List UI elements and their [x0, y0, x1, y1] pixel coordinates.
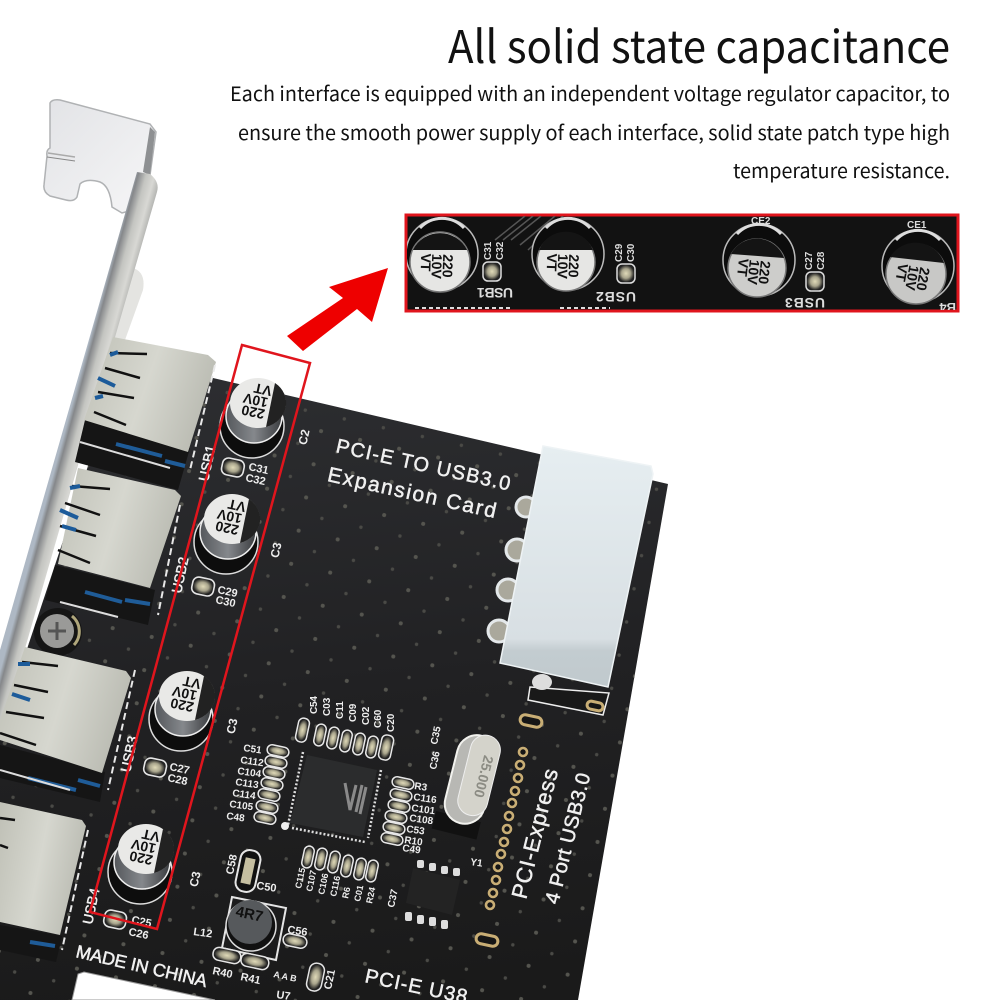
board label: made in China: MADE IN CHINA [74, 941, 209, 991]
component labels above chip: C20 [386, 713, 397, 732]
component labels right of chip: C101 [411, 803, 436, 817]
small capacitor pads and labels near large capacitors: C27 [168, 761, 191, 777]
capacitor array left of chip [253, 744, 290, 825]
inset capacitor 1: 220 [439, 254, 456, 278]
component labels above chip: C60 [373, 709, 384, 728]
inset capacitor 3 [723, 224, 795, 297]
component labels left of chip: C48 [226, 811, 246, 825]
inset silkscreen labels: USB1 [477, 285, 513, 301]
component labels above chip: C11 [335, 701, 346, 719]
board label: PCI-Express 4 Port USB3.0: 4 Port USB3.0 [542, 771, 595, 906]
component labels below chip: C116 [328, 875, 342, 897]
board label: PCI-E to USB3.0: PCI-E TO USB3.0 [334, 435, 512, 495]
gold oblong mounting holes [475, 700, 604, 947]
inductor 4R7 [222, 897, 286, 960]
inset silkscreen labels: C32 [495, 241, 506, 260]
component labels right of chip: C53 [406, 824, 426, 838]
component labels above chip: C54 [309, 696, 320, 714]
lower-left component labels: C21 [322, 968, 338, 991]
capacitor 4 [108, 824, 174, 904]
eight-pin IC [405, 860, 460, 929]
component labels right of chip: C116 [413, 792, 438, 806]
inset silkscreen labels: C27 [804, 251, 815, 270]
capacitor 3 [149, 671, 215, 751]
component labels right of chip: R10 [404, 835, 424, 849]
inset capacitor 3: 220 [755, 260, 774, 285]
inset silkscreen labels: USB3 [785, 295, 825, 311]
small capacitor pads and labels near large capacitors: C29 [216, 584, 239, 600]
capacitor 2: 220 [214, 518, 240, 538]
description text: temperature resistance. [733, 155, 950, 184]
small capacitor pads and labels near large capacitors: C2 [296, 428, 313, 446]
inset small pads [483, 262, 824, 291]
metal PCI bracket [0, 100, 158, 735]
port labels [79, 443, 219, 926]
inset capacitor 3: VT [734, 258, 752, 278]
silkscreen port outlines [62, 365, 215, 950]
capacitor 3: VT [181, 673, 202, 692]
small capacitor pads and labels near large capacitors: C26 [127, 926, 150, 942]
component labels below chip: R24 [364, 886, 377, 904]
lower-left component labels: L12 [193, 926, 213, 941]
small capacitor pads and labels near large capacitors: C28 [166, 772, 189, 788]
small capacitor pads and labels near large capacitors: C3 [268, 541, 285, 559]
capacitor 2: 10V [215, 506, 243, 527]
component labels right of chip [386, 725, 484, 909]
capacitor 1 [220, 378, 286, 458]
black circuit board [0, 378, 668, 1000]
inset silkscreen labels: C28 [816, 251, 827, 270]
capacitor array right of chip [380, 776, 415, 846]
USB port 4 [0, 802, 86, 962]
red arrow [287, 268, 388, 351]
crystal oscillator: 25.000 [471, 754, 497, 799]
capacitor 1: 220 [240, 402, 266, 422]
inset capacitor 4: VT [893, 262, 911, 283]
small capacitor pads and labels near large capacitors: C31 [247, 461, 270, 477]
inset photo of capacitors [406, 215, 958, 315]
inset capacitor 2 [532, 218, 604, 291]
board label: PCI-E to USB3.0: Expansion Card [325, 463, 498, 523]
board label: PCI-E to USB3.0 [325, 435, 512, 525]
component labels right of chip: C49 [402, 843, 422, 857]
component labels left of chip: C113 [235, 777, 260, 791]
small capacitor pads and labels near large capacitors [103, 428, 313, 942]
capacitor 3: 220 [169, 695, 195, 715]
mounting screw [34, 608, 82, 656]
port labels: USB2 [168, 555, 192, 595]
capacitor 2 [194, 494, 260, 574]
capacitor C58 [234, 848, 262, 894]
capacitor 3: 10V [170, 683, 198, 704]
lower-left component labels: A A B [273, 969, 298, 984]
inset capacitor 2: 10V [554, 254, 571, 280]
inset silkscreen labels: CE1 [907, 220, 927, 231]
component labels right of chip: R3 [414, 781, 428, 794]
inset capacitor 4 [882, 230, 954, 304]
component labels below chip: C107 [304, 869, 318, 892]
small pads bottom row [212, 933, 326, 992]
description text: ensure the smooth power supply of each interface, solid state patch type high [238, 117, 950, 146]
inset silkscreen labels: C29 [614, 243, 625, 262]
main controller chip [281, 752, 381, 842]
component labels left of chip: C51 [243, 743, 263, 757]
capacitor 4: 220 [128, 848, 154, 868]
lower-left component labels: C50 [256, 880, 277, 895]
small capacitor pads and labels near large capacitors: C32 [244, 472, 267, 488]
capacitor array above chip [295, 717, 395, 761]
lower-left component labels: C56 [287, 924, 308, 939]
capacitor 1: 10V [241, 390, 269, 411]
component labels right of chip: C36 [428, 750, 443, 771]
inset capacitor 1: VT [418, 253, 434, 272]
component labels right of chip: Y1 [470, 857, 484, 870]
port labels: USB3 [117, 734, 141, 774]
component labels right of chip: C35 [429, 725, 444, 746]
lower-left component labels: R41 [239, 971, 262, 987]
component labels below chip: C01 [352, 884, 365, 902]
component labels left of chip: C114 [232, 788, 257, 802]
title: All solid state capacitance [448, 11, 950, 76]
inset silkscreen labels: B4 [939, 300, 956, 315]
board label: PCI-Express 4 Port USB3.0: PCI-Express [507, 766, 563, 901]
red highlight rectangle [90, 345, 310, 929]
crystal oscillator [432, 728, 504, 840]
lower-left component labels [193, 853, 338, 1000]
component labels left of chip: C105 [229, 799, 254, 813]
inset silkscreen labels: USB2 [596, 289, 636, 305]
port labels: USB4 [79, 886, 103, 926]
capacitor 4: VT [140, 826, 161, 845]
USB port 1 [75, 337, 216, 490]
inset silkscreen labels: CE2 [751, 216, 771, 227]
component labels right of chip: C108 [409, 813, 434, 827]
component labels below chip: R6 [340, 886, 352, 899]
inset silkscreen labels: C30 [626, 243, 637, 262]
inset capacitor 3: 10V [744, 259, 763, 286]
component labels below chip: C115 [293, 867, 307, 889]
port labels: USB1 [195, 443, 219, 483]
small capacitor pads and labels near large capacitors: C3 [187, 870, 204, 888]
lower-left component labels: C58 [224, 853, 240, 876]
inset capacitor 1 [406, 218, 478, 292]
board label: PCI-Express 4 Port USB3.0 [507, 766, 595, 906]
component labels left of chip: C104 [237, 766, 262, 780]
inset capacitor 2: VT [544, 253, 560, 272]
component labels below chip: C106 [316, 872, 330, 895]
Molex power connector [488, 446, 653, 715]
component labels above chip: C09 [348, 703, 359, 722]
component labels above chip: C03 [322, 697, 333, 716]
capacitor 2: VT [226, 496, 247, 515]
description text: Each interface is equipped with an independent voltage regulator capacitor, to [230, 78, 950, 107]
component labels above chip: C02 [361, 706, 372, 725]
component labels below chip [293, 867, 377, 904]
inductor 4R7: 4R7 [234, 903, 265, 926]
inset capacitor 2: 220 [565, 254, 582, 278]
inset capacitor 1: 10V [428, 254, 445, 280]
component labels left of chip: C112 [240, 755, 265, 769]
small capacitor pads and labels near large capacitors: C30 [214, 594, 237, 610]
capacitor 4: 10V [129, 836, 157, 857]
bottom notch [72, 972, 215, 1000]
inset capacitor 4: 220 [913, 266, 933, 292]
component labels left of chip [226, 743, 265, 825]
lower-left component labels: R40 [211, 965, 234, 981]
description text [230, 78, 950, 184]
component labels above chip [309, 696, 397, 732]
small capacitor pads and labels near large capacitors: C3 [224, 717, 241, 735]
component labels right of chip: C37 [386, 888, 401, 909]
USB port 3 [0, 647, 131, 802]
small capacitor pads and labels near large capacitors: C25 [130, 914, 153, 930]
USB port 2 [45, 468, 181, 625]
inset capacitor 4: 10V [902, 264, 922, 292]
capacitor 1: VT [252, 380, 273, 399]
inset silkscreen labels [477, 216, 956, 315]
capacitor array below chip [301, 845, 379, 883]
inset silkscreen labels: C31 [483, 241, 494, 260]
gold through-hole row [486, 748, 527, 909]
